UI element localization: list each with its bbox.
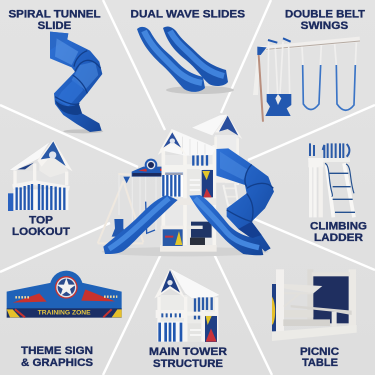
heading: spiral tunnel slide: SPIRAL TUNNEL (8, 8, 101, 20)
icon: theme sign (7, 271, 122, 318)
sign text: TRAINING ZONE (38, 311, 91, 317)
heading: spiral tunnel slide: SLIDE (38, 20, 71, 32)
heading: theme sign and graphics: THEME SIGN (21, 345, 93, 357)
heading: theme sign and graphics (21, 345, 93, 369)
back tower (192, 114, 242, 207)
heading: double belt swings: DOUBLE BELT (285, 8, 365, 20)
heading: double belt swings (285, 8, 365, 32)
heading: main tower structure: STRUCTURE (153, 358, 223, 370)
right wave slide (189, 195, 263, 255)
heading: top lookout: TOP (29, 214, 53, 226)
icon: top lookout (8, 140, 73, 211)
heading: double belt swings: SWINGS (301, 20, 348, 32)
heading: picnic table (300, 346, 339, 369)
heading: climbing ladder (310, 220, 367, 244)
heading: picnic table: PICNIC (300, 346, 339, 358)
heading: picnic table: TABLE (302, 357, 338, 369)
icon: main tower (154, 268, 220, 342)
sign (132, 159, 183, 177)
heading: climbing ladder: CLIMBING (310, 220, 367, 232)
heading: main tower structure (149, 346, 227, 370)
heading: main tower structure: MAIN TOWER (149, 346, 227, 358)
icon: climbing ladder (308, 143, 355, 217)
heading: spiral tunnel slide (8, 8, 101, 32)
main tower frame (160, 145, 217, 252)
tunnel slide (216, 148, 274, 252)
star (57, 278, 76, 296)
left wave slide (103, 195, 178, 254)
heading: top lookout: LOOKOUT (12, 226, 70, 238)
heading: top lookout (12, 214, 70, 238)
icon: picnic table (272, 269, 357, 341)
heading: theme sign and graphics: & GRAPHICS (21, 357, 93, 369)
icon: full playset (98, 114, 274, 256)
heading: climbing ladder: LADDER (314, 232, 363, 244)
front roof (158, 129, 216, 156)
swing frame (98, 174, 160, 243)
icon: spiral tunnel slide (50, 32, 103, 133)
heading: dual wave slides: DUAL WAVE SLIDES (130, 8, 245, 20)
icon: double belt swings (253, 37, 360, 122)
icon: dual wave slides (137, 27, 234, 94)
